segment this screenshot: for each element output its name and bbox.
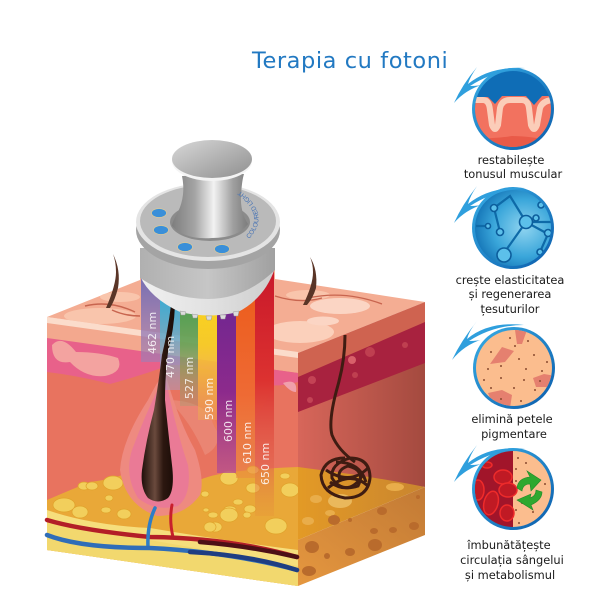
label: circulația sângelui	[460, 553, 564, 567]
icon: skin with spots	[473, 327, 555, 409]
benefit 1: muscle tone	[454, 67, 563, 181]
device	[136, 140, 280, 320]
label	[456, 273, 564, 316]
label: țesuturilor	[481, 302, 540, 316]
wavelength labels: 470 nm	[164, 336, 177, 378]
benefit 2: elasticity	[454, 186, 564, 316]
wavelength labels: 610 nm	[241, 422, 254, 464]
small hair left	[106, 254, 119, 308]
blood vessels	[47, 505, 297, 570]
beam 527 nm	[180, 270, 198, 406]
label	[471, 412, 553, 441]
dermis lighter glands	[168, 367, 272, 455]
beam 650 nm	[255, 270, 274, 516]
title: Terapia cu fotoni	[251, 48, 449, 74]
epidermis edge	[47, 317, 298, 373]
beam 462 nm	[141, 270, 160, 362]
handle	[172, 174, 248, 238]
body	[140, 248, 275, 299]
wavelength labels: 462 nm	[146, 312, 159, 354]
icon: skin folds	[470, 68, 560, 150]
benefit 3: pigment spots	[452, 321, 560, 441]
wavelength labels	[146, 312, 272, 485]
wavelength labels: 650 nm	[259, 443, 272, 485]
left face: dermis	[47, 330, 298, 586]
label: elimină petele	[471, 412, 553, 426]
wavelength labels: 590 nm	[203, 378, 216, 420]
label	[460, 538, 564, 582]
label: pigmentare	[481, 427, 547, 441]
arrow swoosh	[454, 445, 525, 482]
label: și regenerarea	[469, 287, 551, 301]
arrow swoosh	[454, 67, 525, 103]
skin top surface	[47, 270, 425, 353]
label: restabilește	[478, 153, 544, 167]
benefit 4: circulation	[454, 445, 564, 582]
light beams	[141, 270, 274, 516]
hair follicle strand	[142, 305, 175, 502]
right face top band	[298, 302, 425, 378]
label	[464, 153, 563, 181]
follicle	[120, 372, 202, 516]
label: tonusul muscular	[464, 167, 563, 181]
leds	[152, 208, 230, 254]
small hair right	[303, 257, 316, 305]
icon: blood cells and skin	[470, 448, 558, 532]
label: și metabolismul	[465, 568, 555, 582]
skin block illustration	[47, 270, 425, 586]
beam 610 nm	[236, 270, 255, 478]
label: crește elasticitatea	[456, 273, 564, 287]
wavelength labels: 527 nm	[183, 357, 196, 399]
icon: green recycle arrows	[517, 471, 542, 510]
right face fat	[298, 467, 425, 540]
right face sponge	[298, 487, 425, 586]
pink epidermis layer	[47, 338, 298, 386]
icon: molecule	[472, 187, 554, 269]
sweat gland hair coil	[321, 335, 370, 498]
wavelength labels: 600 nm	[222, 400, 235, 442]
knob	[172, 141, 252, 181]
disc	[136, 191, 280, 269]
fat layer	[47, 466, 299, 586]
beam 600 nm	[217, 270, 236, 473]
arrow swoosh	[452, 321, 524, 360]
handle socket	[170, 203, 250, 241]
arrow swoosh	[454, 186, 525, 223]
beam 470 nm	[160, 270, 180, 390]
label: îmbunătățește	[466, 538, 551, 552]
device label: COLOURED LIGHT	[237, 192, 258, 238]
lower cone	[140, 268, 275, 316]
beam 590 nm	[198, 270, 217, 420]
right face crimson band	[298, 322, 425, 412]
right face dermis	[298, 322, 425, 487]
teeth	[180, 311, 239, 320]
